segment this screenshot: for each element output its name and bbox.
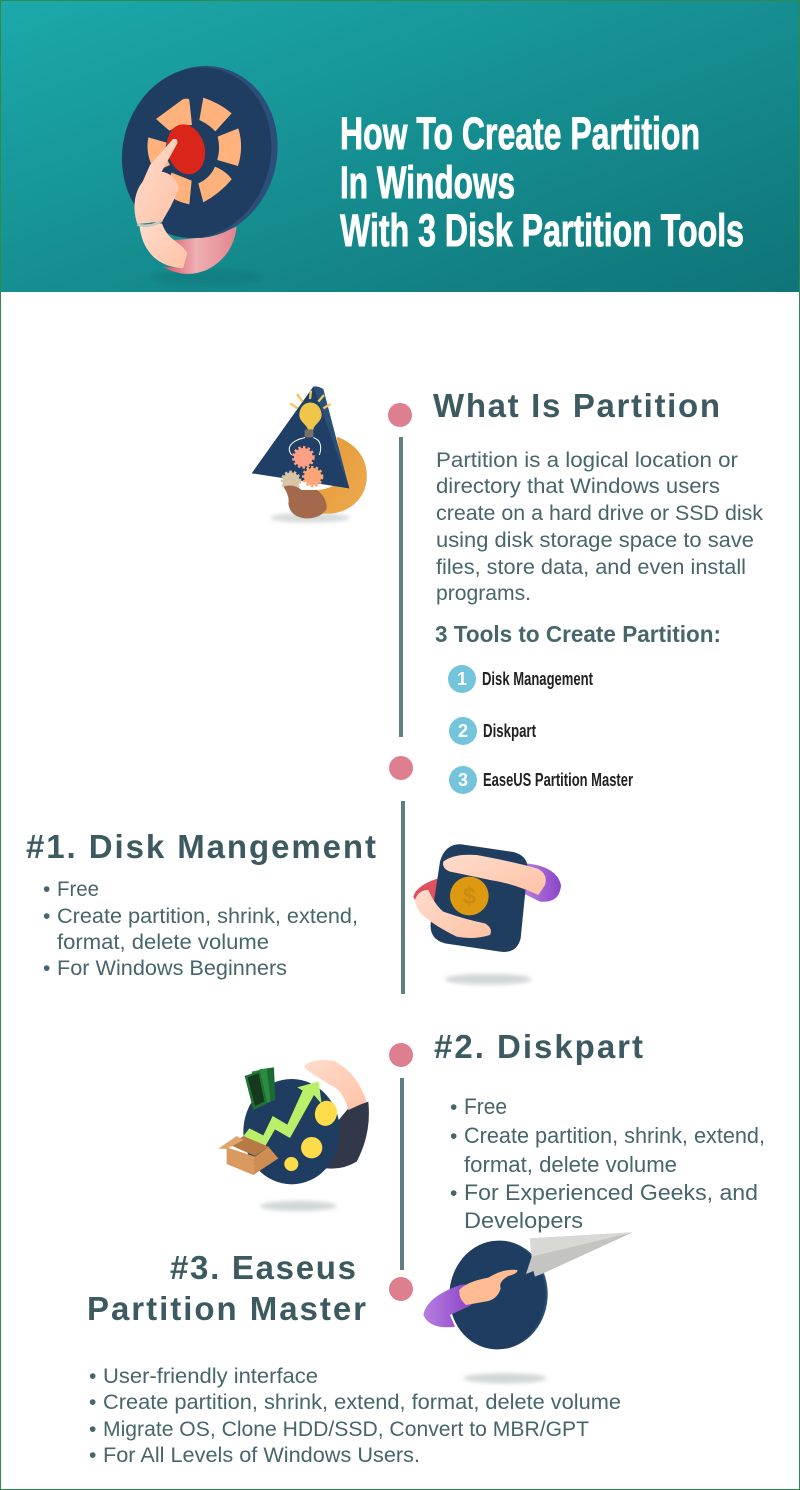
Easeus bullets <box>89 1365 621 1467</box>
icon: disc with pointing hand <box>104 50 296 285</box>
Easeus bullets: User-friendly interface <box>103 1365 318 1388</box>
subheading: 3 tools: 3 Tools to Create Partition: <box>435 621 721 647</box>
Diskpart bullets <box>450 1094 765 1233</box>
partition definition text: programs. <box>436 582 531 605</box>
Disk Management bullets: For Windows Beginners <box>57 957 287 980</box>
Disk Management bullets: • <box>43 878 50 901</box>
tool list: Disk Management <box>482 669 593 689</box>
Easeus bullets: • <box>89 1365 96 1388</box>
timeline dot 3 <box>389 1043 413 1067</box>
Disk Management bullets: • <box>43 957 50 980</box>
Easeus bullets: • <box>89 1444 96 1467</box>
timeline dot 1 <box>388 403 412 427</box>
timeline line segment 3 <box>400 1078 404 1270</box>
Easeus bullets: For All Levels of Windows Users. <box>103 1444 420 1467</box>
timeline line segment 2 <box>401 801 405 994</box>
title: In Windows <box>340 157 515 208</box>
Easeus bullets: Create partition, shrink, extend, format, delete volume <box>103 1391 621 1414</box>
heading: Disk Management: #1. Disk Mangement <box>26 828 376 865</box>
tool list: 3 <box>458 770 468 790</box>
Diskpart bullets: • <box>450 1182 457 1205</box>
Disk Management bullets: format, delete volume <box>57 931 269 954</box>
icon: hands holding coin card: $ <box>463 883 476 909</box>
icon: lightbulb, gears and hand <box>252 386 367 522</box>
timeline dot 4 <box>389 1277 413 1301</box>
icon: hands holding coin card <box>413 844 561 985</box>
Diskpart bullets: For Experienced Geeks, and <box>464 1180 758 1205</box>
Easeus bullets: • <box>89 1418 96 1441</box>
Diskpart bullets: Developers <box>464 1208 583 1233</box>
Diskpart bullets: format, delete volume <box>464 1152 677 1177</box>
tool list: 2 <box>458 721 468 741</box>
partition definition text: create on a hard drive or SSD disk <box>436 502 763 525</box>
title <box>340 108 744 256</box>
Diskpart bullets: • <box>450 1125 457 1148</box>
Diskpart bullets: Free <box>464 1094 507 1119</box>
Disk Management bullets: • <box>43 905 50 928</box>
heading: Easeus Partition Master <box>87 1249 366 1327</box>
partition definition text: using disk storage space to save <box>436 529 754 552</box>
heading: Easeus Partition Master: #3. Easeus <box>170 1249 356 1286</box>
tool list <box>448 665 633 794</box>
Easeus bullets: • <box>89 1391 96 1414</box>
tool list: EaseUS Partition Master <box>483 770 633 790</box>
heading: Diskpart: #2. Diskpart <box>434 1028 643 1065</box>
partition definition text: Partition is a logical location or <box>436 449 738 472</box>
Disk Management bullets: Free <box>57 878 99 901</box>
heading: Easeus Partition Master: Partition Master <box>87 1290 366 1327</box>
tool list: Diskpart <box>483 721 536 741</box>
Disk Management bullets <box>43 878 358 980</box>
timeline line segment 1 <box>399 437 403 737</box>
Disk Management bullets: Create partition, shrink, extend, <box>57 905 358 928</box>
Diskpart bullets: Create partition, shrink, extend, <box>464 1123 765 1148</box>
icon: paper plane and pointing hand <box>423 1232 633 1383</box>
heading: What Is Partition: What Is Partition <box>433 387 720 424</box>
partition definition text: files, store data, and even install <box>436 556 746 579</box>
Diskpart bullets: • <box>450 1096 457 1119</box>
Easeus bullets: Migrate OS, Clone HDD/SSD, Convert to MBR/GPT <box>103 1418 589 1441</box>
partition definition text <box>436 449 763 605</box>
tool list: 1 <box>457 669 467 689</box>
partition definition text: directory that Windows users <box>436 475 720 498</box>
header banner <box>1 1 799 292</box>
timeline dot 2 <box>389 756 413 780</box>
icon: growth arrow with money box <box>218 1060 369 1211</box>
